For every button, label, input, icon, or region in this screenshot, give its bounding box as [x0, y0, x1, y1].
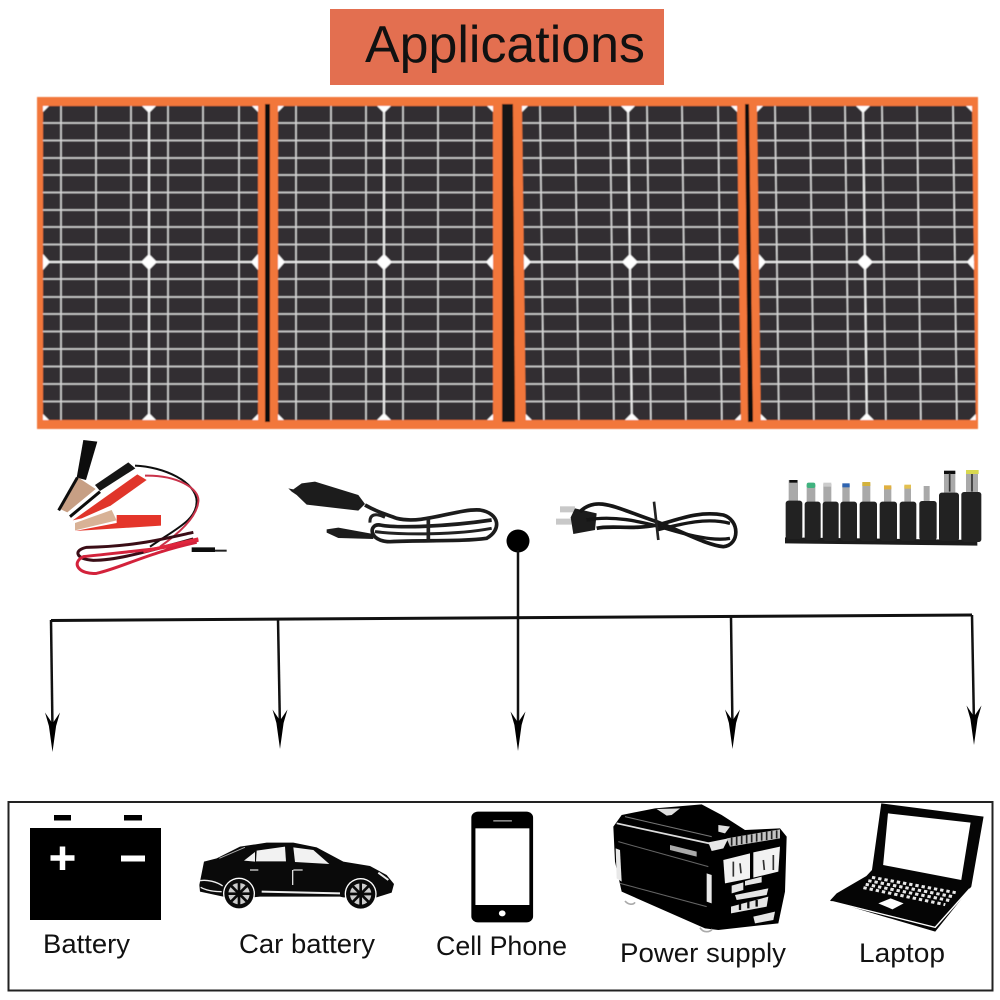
- solar cell panel 4: [757, 106, 976, 420]
- accessory: car charger cable: [288, 482, 497, 542]
- title: [330, 9, 664, 85]
- solar cell panel 3: [522, 106, 741, 420]
- arrow to laptop: [966, 615, 982, 745]
- solar panel: [37, 97, 978, 429]
- icon: cell phone: [471, 812, 533, 922]
- accessory: DC adapter tips: [785, 470, 981, 546]
- arrow to battery: [45, 620, 60, 752]
- accessory: alligator clip cable: [59, 440, 227, 573]
- icon: laptop: [830, 803, 984, 932]
- arrow to power supply: [725, 617, 740, 749]
- solar cell panel 2: [278, 106, 493, 420]
- icon: car: [199, 843, 394, 910]
- icon: battery: [30, 815, 161, 920]
- solar cell panel 1: [43, 106, 258, 420]
- accessory: AC plug cable: [556, 502, 736, 547]
- label: car battery: Car battery: [239, 929, 375, 959]
- distribution arrows: [45, 550, 982, 752]
- panel: applications: [8, 802, 992, 990]
- label: cell phone: Cell Phone: [436, 931, 567, 961]
- arrow to cell phone: [510, 712, 526, 751]
- title: Applications: [365, 16, 645, 74]
- label: laptop: Laptop: [859, 938, 945, 968]
- connector dot: [506, 530, 530, 552]
- icon: power supply: [613, 804, 787, 932]
- label: battery: Battery: [43, 929, 130, 959]
- arrow to car battery: [272, 619, 288, 749]
- label: power supply: Power supply: [620, 938, 786, 968]
